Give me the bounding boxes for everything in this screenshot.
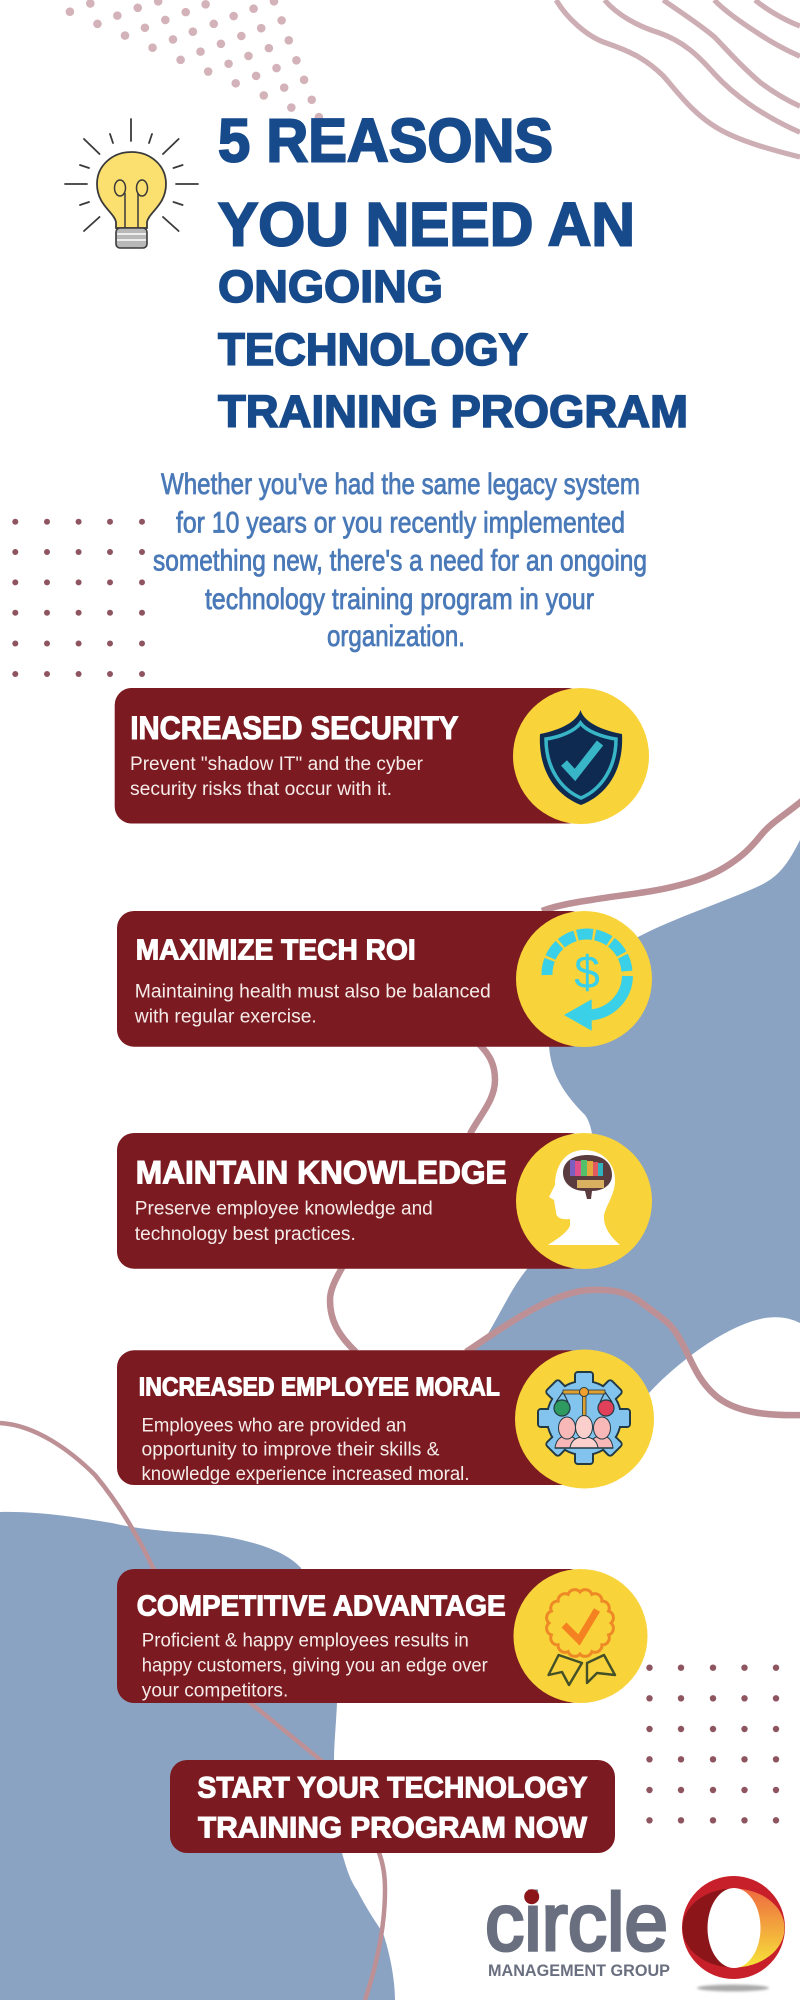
background blob: bottom-left blue shape (0, 1512, 395, 2000)
text: increased employee moral description (142, 1416, 470, 1485)
intro paragraph: technology training program in your (205, 583, 594, 616)
decorative dots: right grid (646, 1664, 779, 1824)
call to action button: START YOUR TECHNOLOGY (197, 1772, 587, 1805)
intro paragraph: Whether you've had the same legacy system (161, 468, 640, 501)
call to action button (170, 1760, 615, 1853)
heading: maximize tech ROI: MAXIMIZE TECH ROI (136, 934, 416, 966)
icon: yellow circle with dollar return arrow (516, 911, 652, 1047)
title: TRAINING PROGRAM (218, 386, 688, 437)
decorative curve: upper right winding line (330, 800, 800, 1415)
intro paragraph (153, 468, 647, 653)
background blob: right blue shape (466, 840, 800, 1440)
text: competitive advantage description (142, 1631, 488, 1702)
intro paragraph: organization. (327, 620, 465, 653)
icon: light bulb (65, 119, 198, 248)
logo emblem (682, 1876, 785, 1979)
text: maintain knowledge description: Preserve employee knowledge and (135, 1198, 433, 1219)
intro paragraph: for 10 years or you recently implemented (176, 506, 625, 540)
decorative waves: top right lines (556, 0, 800, 157)
text: maximize tech ROI description (134, 981, 491, 1028)
text: maximize tech ROI description: Maintaining health must also be balanced (135, 981, 491, 1002)
heading: increased security: INCREASED SECURITY (130, 710, 458, 746)
logo tagline: MANAGEMENT GROUP (488, 1961, 670, 1980)
logo red dot (524, 1889, 539, 1904)
text: increased employee moral description: knowledge experience increased moral. (142, 1464, 470, 1485)
icon: yellow circle with head and book brain (516, 1133, 652, 1269)
intro paragraph: something new, there's a need for an ongoing (153, 545, 647, 578)
title: ONGOING (218, 261, 443, 312)
logo wordmark: circle (485, 1877, 668, 1968)
text: increased security description: Prevent "shadow IT" and the cyber (130, 754, 424, 775)
text: competitive advantage description: happy customers, giving you an edge over (142, 1656, 488, 1677)
panel: maintain knowledge (117, 1133, 652, 1269)
logo shadow (697, 1985, 769, 1991)
panel: maximize tech ROI (117, 911, 652, 1047)
text: increased security description (130, 754, 424, 800)
icon: yellow circle with award medal (514, 1569, 648, 1703)
icon: yellow circle with gear, scales and people (515, 1350, 654, 1488)
text: competitive advantage description: your competitors. (142, 1681, 288, 1702)
logo: circle management group (485, 1876, 785, 1991)
decorative dots: top left diagonal pattern (66, 0, 323, 121)
icon: yellow circle with dollar return arrow: $ (574, 946, 600, 998)
text: maintain knowledge description: technology best practices. (135, 1224, 356, 1245)
decorative curve: lower left winding line (0, 1423, 385, 2000)
title (218, 106, 688, 437)
text: increased employee moral description: Employees who are provided an (142, 1416, 406, 1437)
title: 5 REASONS (218, 106, 553, 174)
text: maximize tech ROI description: with regular exercise. (134, 1007, 317, 1028)
heading: maintain knowledge: MAINTAIN KNOWLEDGE (136, 1154, 507, 1190)
decorative dots: left grid (12, 519, 145, 677)
text: maintain knowledge description (135, 1198, 433, 1245)
panel: competitive advantage (117, 1569, 648, 1703)
heading: competitive advantage: COMPETITIVE ADVANTAGE (137, 1591, 506, 1623)
panel: increased employee moral (117, 1350, 654, 1488)
title: TECHNOLOGY (218, 324, 528, 375)
text: competitive advantage description: Proficient & happy employees results in (142, 1631, 469, 1652)
heading: increased employee moral: INCREASED EMPLOYEE MORAL (139, 1374, 500, 1402)
title: YOU NEED AN (218, 190, 635, 258)
call to action button: TRAINING PROGRAM NOW (198, 1812, 588, 1845)
text: increased employee moral description: opportunity to improve their skills & (142, 1440, 440, 1461)
icon: yellow circle with shield (513, 688, 649, 824)
panel: increased security (115, 688, 649, 824)
text: increased security description: security risks that occur with it. (130, 779, 392, 800)
